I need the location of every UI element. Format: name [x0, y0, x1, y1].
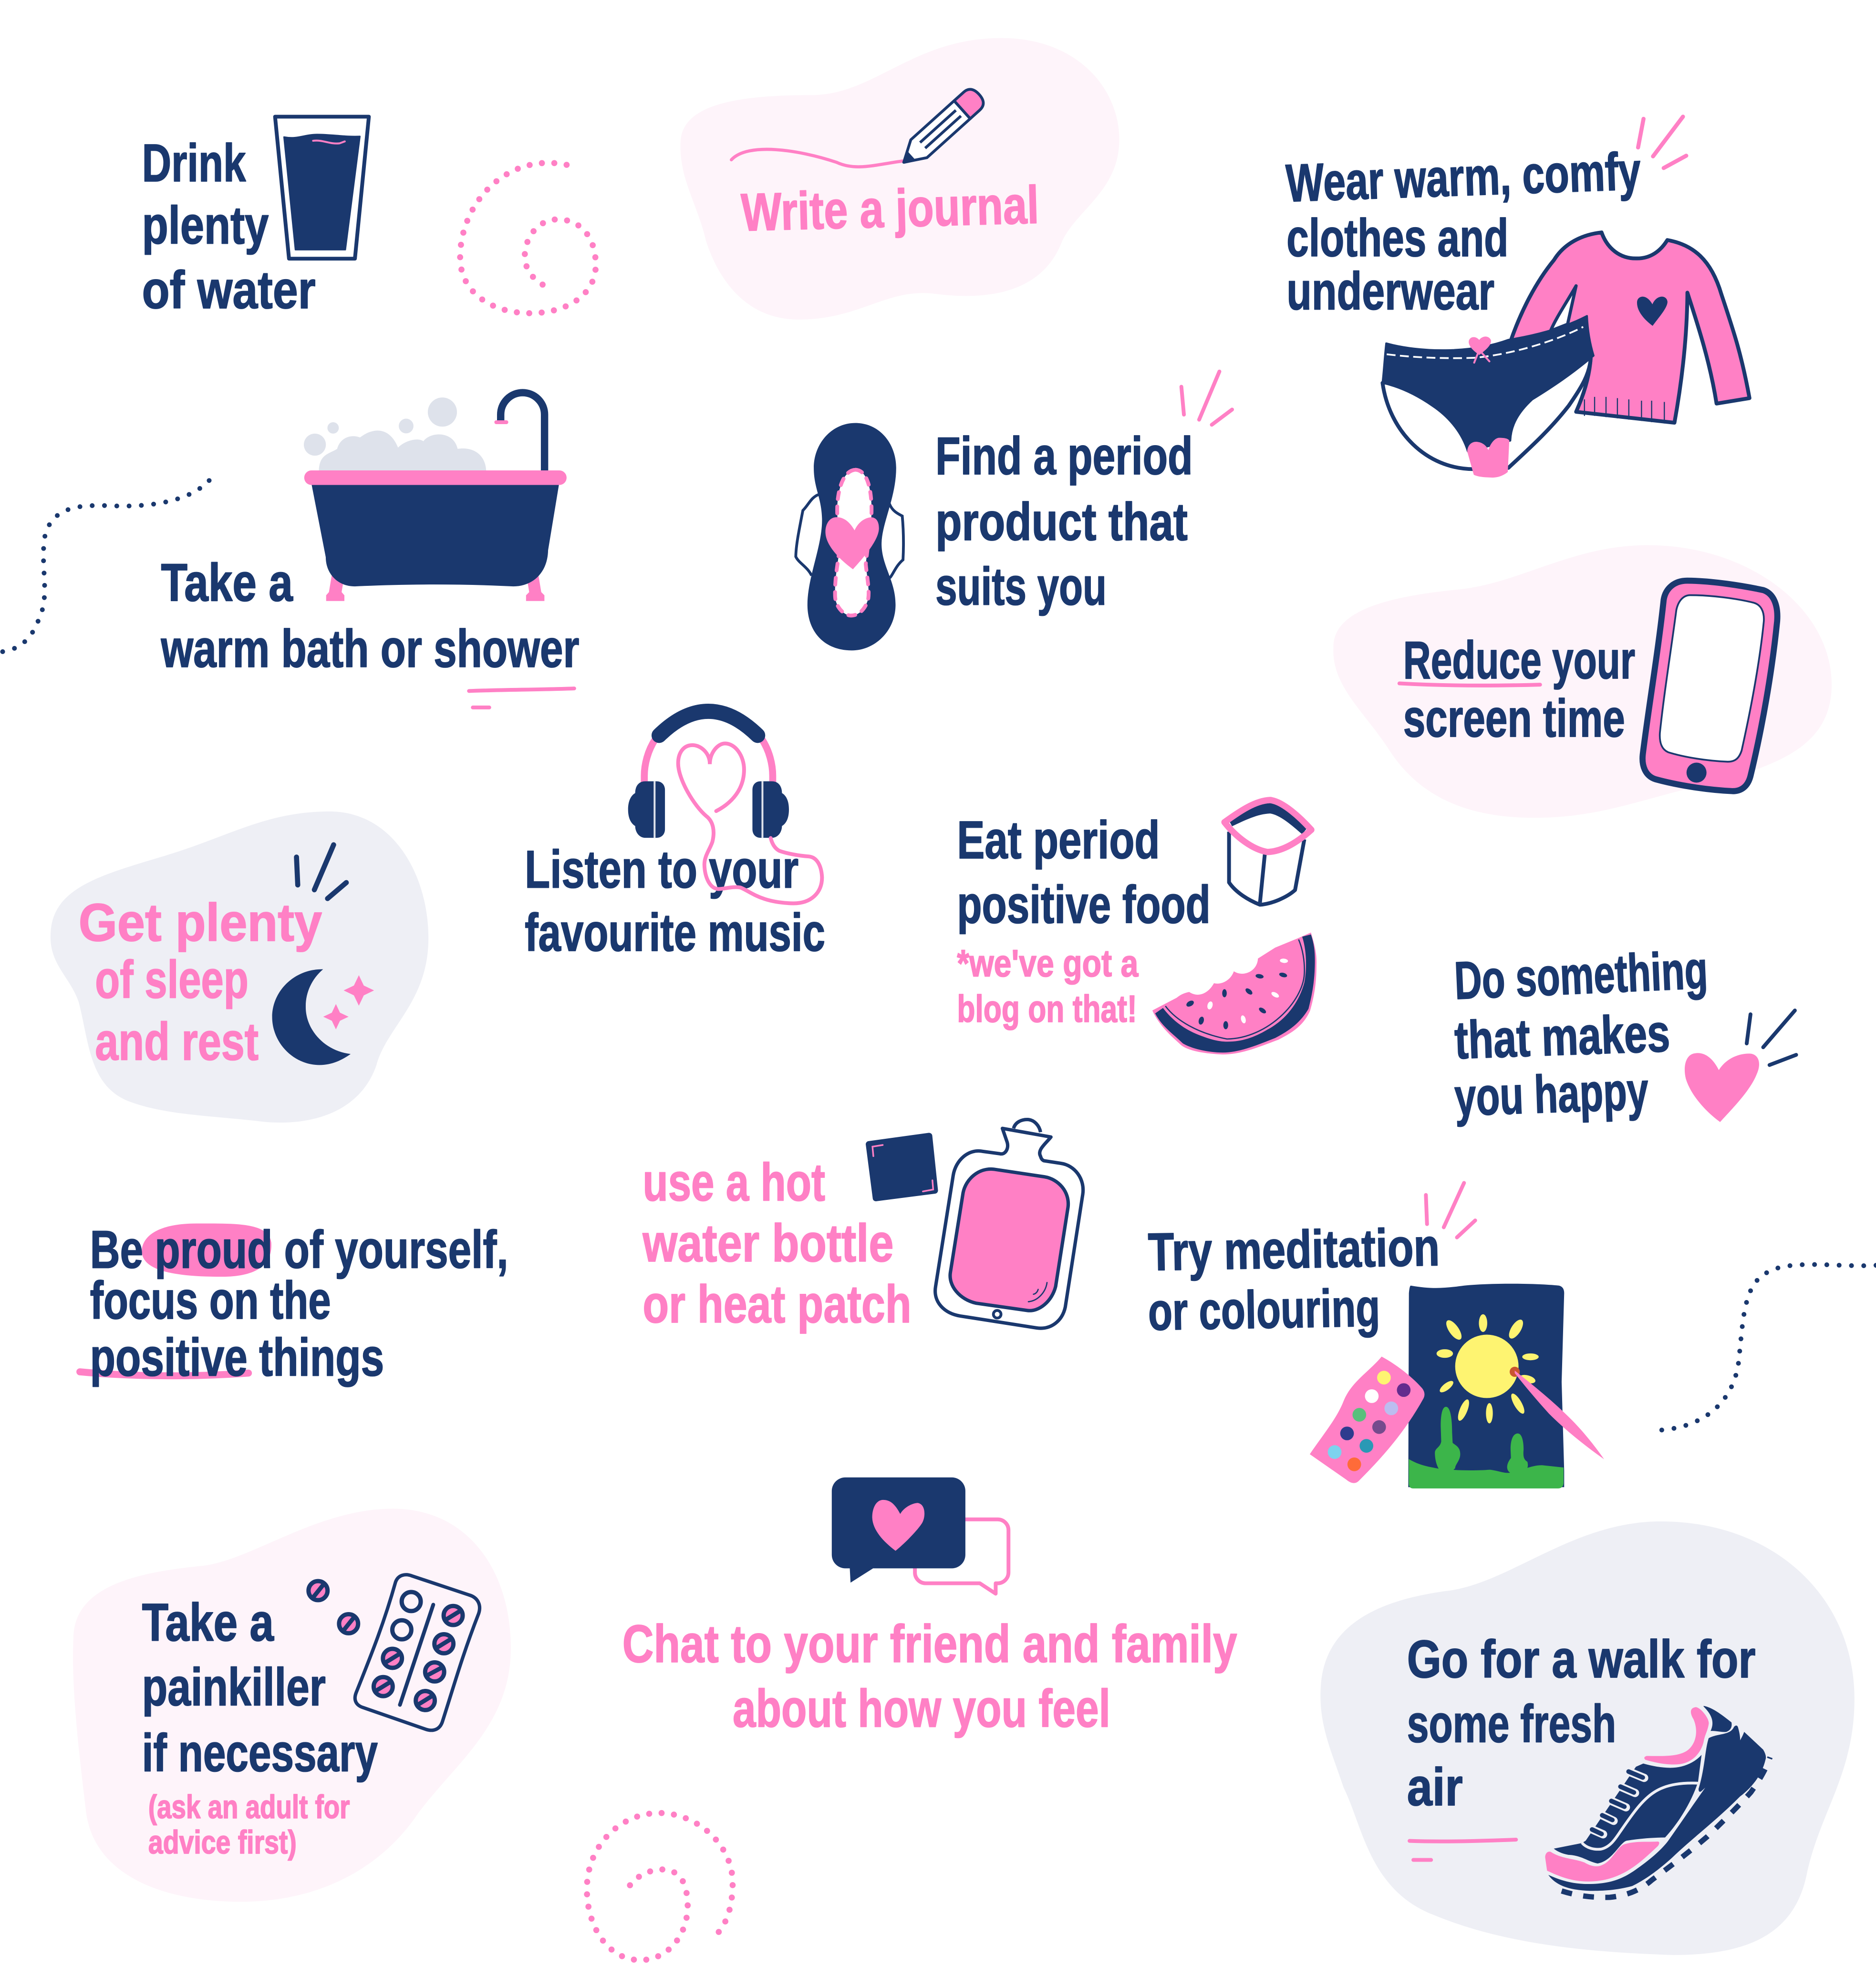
text: eat period positive food: positive food — [957, 875, 1211, 935]
text: take a painkiller if necessary: Take a — [142, 1592, 274, 1652]
panel: chat to friends and family — [622, 1478, 1237, 1738]
icon: painting of the sun — [1408, 1284, 1604, 1488]
text: eat period positive food — [957, 810, 1211, 935]
icon: watermelon slice — [1152, 933, 1316, 1054]
panel: find a period product — [796, 372, 1232, 650]
icon: pink heart — [1685, 1053, 1759, 1122]
panel: be proud of yourself — [80, 1220, 508, 1387]
underline: positive — [80, 1372, 249, 1376]
text: wear warm comfy clothes and underwear — [1285, 141, 1642, 321]
icon: speech bubbles — [832, 1478, 1008, 1593]
panel: take a painkiller — [73, 1509, 511, 1902]
icon: running shoe — [1545, 1706, 1770, 1897]
text: do something that makes you happy: that makes — [1453, 1003, 1671, 1070]
text: drink plenty of water: plenty — [142, 195, 269, 255]
blob: phone background — [1333, 545, 1832, 818]
text: get plenty of sleep and rest: of sleep — [95, 949, 249, 1009]
blob: sleep background — [51, 812, 428, 1123]
text: listen to your favourite music: favourite music — [525, 903, 825, 962]
icon: sparkle lines — [297, 845, 346, 898]
icon: glass of water — [275, 117, 369, 259]
text: take a warm bath or shower: Take a — [161, 553, 293, 613]
underline stroke — [1399, 683, 1540, 686]
underline strokes — [1410, 1840, 1516, 1860]
text: try meditation or colouring: or colouring — [1148, 1278, 1380, 1342]
text: be proud of yourself: positive things — [90, 1327, 384, 1387]
icon: period underwear — [1382, 316, 1594, 478]
text: listen to your favourite music: Listen to your — [525, 839, 798, 899]
decoration: pink dotted spiral bottom — [587, 1813, 733, 1960]
icon: heat patch — [869, 1136, 935, 1198]
text: write a journal: Write a journal — [740, 175, 1040, 242]
icon: paint palette — [1310, 1357, 1424, 1483]
icon: bath tub — [304, 393, 567, 601]
text: chat to your friend and family about how you feel: about how you feel — [733, 1678, 1110, 1738]
icon: blister pack — [355, 1575, 479, 1730]
text: find a period product that suits you: product that — [935, 492, 1188, 552]
text: take a painkiller if necessary — [142, 1592, 378, 1783]
text: take a warm bath or shower: warm bath or shower — [161, 619, 579, 678]
text: get plenty of sleep and rest: and rest — [95, 1012, 259, 1072]
blob: journal background — [681, 38, 1119, 320]
underline strokes — [469, 688, 574, 708]
panel: try meditation or colouring — [1148, 1183, 1604, 1488]
text: eat period positive food: Eat period — [957, 810, 1160, 870]
text: drink plenty of water: of water — [142, 260, 316, 320]
text: chat to your friend and family about how you feel — [622, 1614, 1237, 1738]
text: listen to your favourite music — [525, 839, 825, 962]
decoration: pink dotted spiral top — [460, 163, 596, 313]
text: reduce your screen time: screen time — [1403, 688, 1625, 748]
text: drink plenty of water — [142, 133, 316, 320]
text: be proud of yourself — [90, 1220, 508, 1387]
pink pencil line — [731, 149, 902, 167]
text: get plenty of sleep and rest: Get plenty — [79, 893, 322, 952]
panel: get plenty of sleep — [51, 812, 428, 1123]
panel: warm bath or shower — [161, 393, 579, 708]
text: try meditation or colouring: Try meditation — [1148, 1217, 1440, 1282]
icon: sparkle lines — [1182, 372, 1232, 425]
icon: loose pills — [309, 1581, 358, 1633]
panel: hot water bottle or heat patch — [642, 1120, 1083, 1334]
blob: painkiller background — [73, 1509, 511, 1902]
heart shaped headphone cable — [678, 743, 822, 903]
text: use a hot water bottle or heat patch: use a hot — [643, 1153, 825, 1212]
text: wear warm comfy clothes and underwear: Wear warm, comfy — [1285, 141, 1642, 213]
text: take a warm bath or shower — [161, 553, 579, 678]
icon: sparkle lines — [1426, 1183, 1475, 1238]
icon: sparkle lines — [1638, 117, 1686, 168]
icon: smartphone — [1643, 581, 1777, 791]
text: ask an adult note: (ask an adult for — [148, 1788, 350, 1825]
text: get plenty of sleep and rest — [79, 893, 322, 1072]
text: wear warm comfy clothes and underwear: underwear — [1286, 261, 1494, 321]
decoration: navy dotted line right — [1660, 1265, 1876, 1430]
icon: sanitary pad — [796, 423, 903, 650]
icon: pencil — [896, 85, 987, 171]
decoration: navy dotted line left — [2, 480, 209, 652]
text: take a painkiller if necessary: painkiller — [142, 1657, 326, 1717]
text: do something that makes you happy: you happy — [1453, 1061, 1649, 1127]
text: use a hot water bottle or heat patch: or heat patch — [643, 1274, 912, 1334]
icon: moon and stars — [272, 969, 374, 1065]
text: ask an adult note: advice first) — [148, 1823, 297, 1861]
panel: write a journal — [681, 38, 1119, 320]
text: blog note — [957, 942, 1139, 1030]
text: reduce your screen time — [1403, 630, 1635, 748]
panel: drink plenty of water — [142, 117, 369, 320]
text: go for a walk for some fresh air: air — [1407, 1757, 1463, 1817]
panel: go for a walk — [1320, 1521, 1855, 1955]
blob: walk background — [1320, 1521, 1855, 1955]
text: be proud of yourself: Be proud of yourself, — [90, 1220, 508, 1280]
text: do something that makes you happy: Do something — [1453, 940, 1709, 1010]
text: go for a walk for some fresh air: some fresh — [1407, 1694, 1616, 1753]
text: use a hot water bottle or heat patch: water bottle — [642, 1213, 893, 1273]
text: chat to your friend and family about how you feel: Chat to your friend and family — [622, 1614, 1237, 1674]
text: use a hot water bottle or heat patch — [642, 1153, 912, 1334]
text: try meditation or colouring — [1148, 1217, 1440, 1342]
icon: headphones — [628, 711, 789, 838]
panel: reduce screen time — [1333, 545, 1832, 818]
panel: listen to music — [525, 711, 825, 962]
text: go for a walk for some fresh air: Go for a walk for — [1407, 1629, 1756, 1689]
icon: pink sweater — [1510, 232, 1750, 424]
panel: eat period positive food — [957, 800, 1316, 1054]
icon: hot water bottle — [935, 1120, 1083, 1328]
text: find a period product that suits you: suits you — [935, 557, 1107, 616]
text: ask an adult note — [148, 1788, 350, 1861]
highlight: proud — [142, 1223, 271, 1277]
text: take a painkiller if necessary: if necessary — [142, 1723, 378, 1783]
icon: yoghurt pot — [1224, 800, 1311, 905]
text: be proud of yourself: focus on the — [90, 1270, 331, 1330]
text: wear warm comfy clothes and underwear: clothes and — [1286, 208, 1508, 268]
panel: wear warm comfy clothes — [1285, 117, 1750, 478]
text: blog note: blog on that! — [957, 988, 1137, 1030]
text: do something that makes you happy — [1453, 940, 1709, 1127]
text: go for a walk for some fresh air — [1407, 1629, 1756, 1817]
text: blog note: *we've got a — [957, 942, 1139, 984]
panel: do something that makes you happy — [1453, 940, 1796, 1127]
text: drink plenty of water: Drink — [142, 133, 246, 193]
text: find a period product that suits you: Find a period — [935, 426, 1193, 486]
text: reduce your screen time: Reduce your — [1403, 630, 1635, 690]
text: find a period product that suits you — [935, 426, 1193, 616]
icon: sparkle lines — [1747, 1010, 1796, 1065]
